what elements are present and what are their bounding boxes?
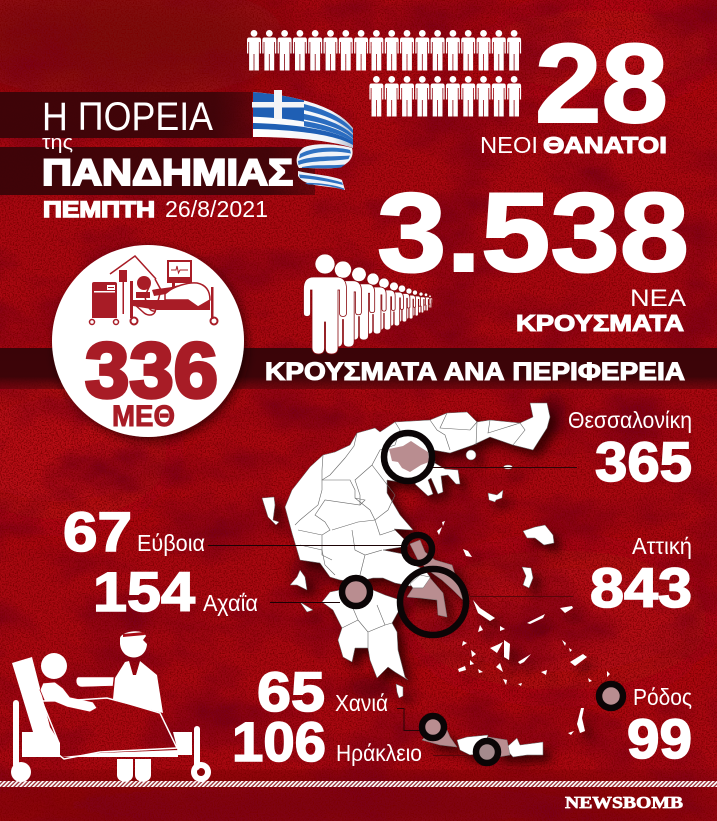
- cases figure: [377, 170, 689, 336]
- ICU circle panel: [52, 245, 244, 437]
- logo: Newsbomb: NEWSBOMB: [565, 793, 683, 812]
- regions heading: ΚΡΟΥΣΜΑΤΑ ΑΝΑ ΠΕΡΙΦΕΡΕΙΑ: [265, 358, 685, 386]
- backrest and seat: [12, 657, 60, 757]
- label: Heraklion: Ηράκλειο: [336, 740, 422, 766]
- cases label: ΝΕΑ: [630, 285, 686, 312]
- label: Evia: Εύβοια: [137, 530, 205, 556]
- patient: [41, 653, 67, 679]
- 28 deaths pictogram: [247, 30, 521, 116]
- title line 3: ΠΑΝΔΗΜΙΑΣ: [42, 152, 293, 193]
- Crete pink parts: [422, 730, 510, 757]
- label: Achaia: [93, 560, 258, 623]
- queue of people icon: [304, 254, 433, 354]
- label: Evia: [63, 500, 205, 563]
- cases figure: ΚΡΟΥΣΜΑΤΑ: [516, 310, 684, 336]
- ring: Thessaloniki: [384, 433, 432, 481]
- label: Thessaloniki: 365: [595, 430, 692, 493]
- row two: [369, 76, 521, 116]
- Chios: [522, 567, 533, 588]
- map of Greece: [208, 390, 623, 763]
- Karpathos: [568, 708, 585, 735]
- Peloponnese: [322, 590, 408, 680]
- Zakynthos: [300, 602, 313, 612]
- Corfu: [262, 497, 279, 525]
- label: Heraklion: 106: [232, 710, 326, 773]
- icon: greek flag ribbon: [252, 90, 353, 190]
- bed frame: [62, 732, 192, 757]
- title block: [42, 95, 293, 222]
- label: Thessaloniki: [568, 407, 692, 493]
- title band bottom: [0, 147, 315, 195]
- label: Evia: 67: [63, 500, 132, 563]
- Ikaria and Samos: [527, 606, 573, 624]
- Cyclades: [458, 600, 547, 686]
- ICU label: ΜΕΘ: [112, 400, 175, 433]
- deaths figure: ΘΑΝΑΤΟΙ: [543, 132, 667, 158]
- highlight rings: [342, 433, 623, 763]
- row one: [247, 30, 521, 70]
- label: Attica: Αττική: [632, 533, 692, 559]
- label: Attica: [590, 533, 692, 619]
- label: Heraklion: [232, 710, 422, 773]
- region borders: [295, 413, 525, 648]
- ring: Evia: [404, 535, 432, 563]
- ring: Chania: [422, 716, 444, 738]
- Thasos: [466, 450, 476, 460]
- Attica white tip: [410, 575, 430, 588]
- title line 2: της: [42, 132, 73, 154]
- Kefalonia: [290, 570, 307, 590]
- label: Rhodes: 99: [627, 707, 692, 770]
- Attica: [407, 578, 447, 617]
- Dodecanese: [562, 640, 610, 682]
- title band top: [0, 92, 252, 138]
- posts: [13, 700, 19, 768]
- title line 1: Η ΠΟΡΕΙΑ: [42, 95, 213, 139]
- ring: Attica: [400, 569, 466, 635]
- label: Achaia: 154: [93, 560, 195, 623]
- date: 26/8/2021: [165, 196, 268, 222]
- label: Chania: Χανιά: [335, 690, 388, 716]
- Chalkidiki: [415, 462, 460, 496]
- label: Attica: 843: [590, 556, 692, 619]
- day: ΠΕΜΠΤΗ: [43, 197, 155, 222]
- number 3.538: 3.538: [377, 170, 689, 295]
- Kythira: [396, 684, 403, 698]
- doctor: [120, 631, 147, 658]
- number 336: 336: [85, 326, 218, 414]
- regions band: [0, 348, 717, 389]
- Lemnos: [488, 490, 503, 502]
- sea shading: [290, 390, 566, 698]
- label: Thessaloniki: Θεσσαλονίκη: [568, 407, 692, 433]
- leader lines: [208, 468, 577, 756]
- Euboea: [410, 540, 463, 600]
- landmass: [262, 403, 610, 757]
- hatched rule: [0, 781, 717, 787]
- label: Chania: [257, 660, 388, 723]
- label: Achaia: Αχαΐα: [203, 590, 258, 616]
- deaths figure: [480, 21, 668, 158]
- icon: doctor and patient: [11, 631, 211, 782]
- mainland: [285, 403, 550, 586]
- Samothraki: [504, 465, 512, 469]
- white disc: [52, 245, 244, 437]
- Crete white parts: [457, 735, 543, 757]
- Lesvos: [523, 525, 554, 545]
- ring: Achaia: [342, 578, 370, 606]
- Sporades: [437, 521, 472, 557]
- blanket: [42, 698, 177, 759]
- label: Rhodes: Ρόδος: [633, 684, 692, 710]
- deaths label: ΝΕΟΙ: [480, 132, 538, 158]
- ring: Heraklion: [476, 741, 498, 763]
- label: Chania: 65: [257, 660, 325, 723]
- icon: ICU bed: [90, 256, 218, 324]
- number 28: 28: [535, 21, 668, 146]
- ring: Rhodes: [599, 684, 623, 708]
